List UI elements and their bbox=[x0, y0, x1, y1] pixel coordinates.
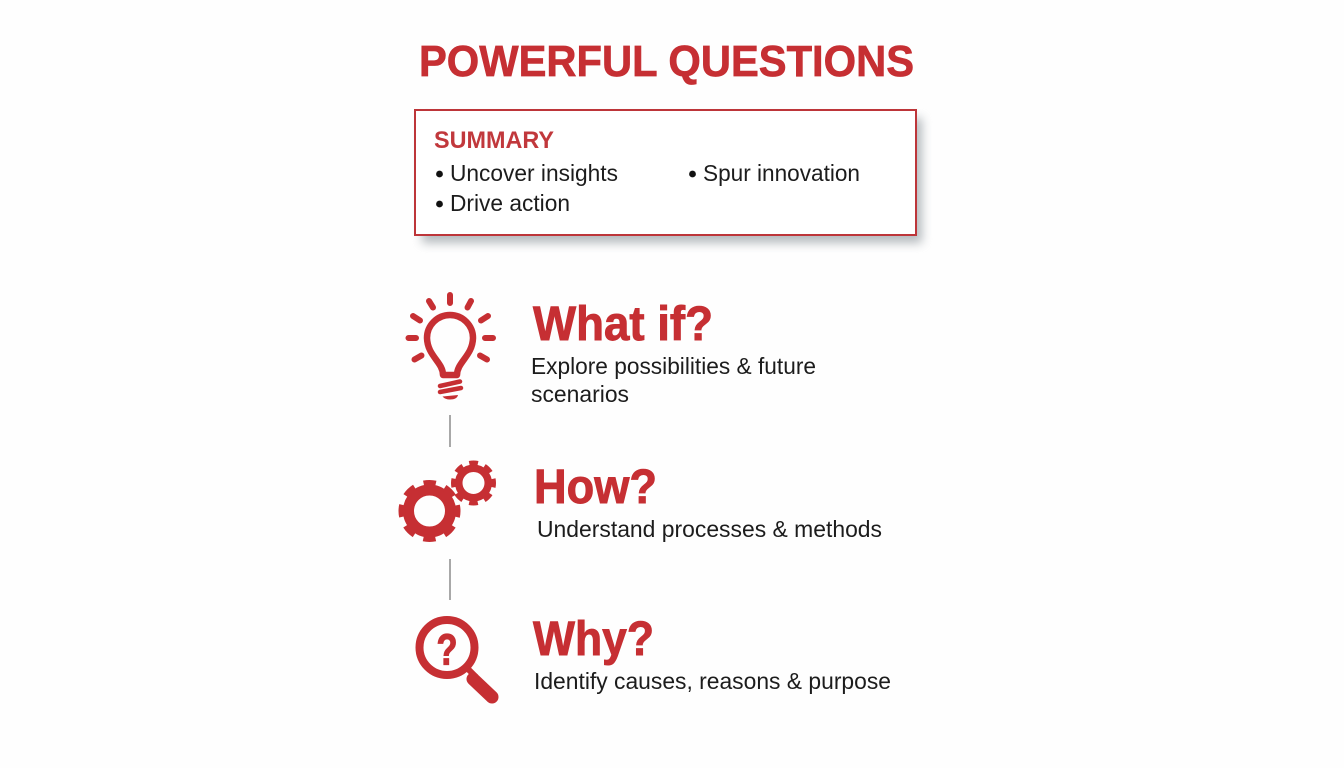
heading: why: Why? bbox=[533, 613, 654, 666]
text: why description: Identify causes, reasons & purpose bbox=[534, 668, 891, 694]
icon: gears bbox=[402, 463, 494, 538]
connector: how to why bbox=[449, 559, 451, 600]
heading: how: How? bbox=[534, 461, 657, 514]
text: what if description: Explore possibilities & future bbox=[531, 353, 816, 379]
connector: what if to how bbox=[449, 415, 451, 447]
icon: magnifying glass with question mark bbox=[420, 620, 492, 697]
summary item: uncover insights: Uncover insights bbox=[450, 160, 618, 186]
icon: magnifying glass with question mark: ? bbox=[436, 626, 458, 674]
text: what if description: scenarios bbox=[531, 381, 629, 407]
summary item: spur innovation: Spur innovation bbox=[703, 160, 860, 186]
summary heading: SUMMARY bbox=[434, 127, 554, 154]
icon: light bulb bbox=[408, 295, 493, 400]
panel: summary bbox=[415, 110, 922, 243]
heading: what if: What if? bbox=[533, 298, 713, 351]
summary item: drive action: Drive action bbox=[450, 190, 570, 216]
text: how description: Understand processes & methods bbox=[537, 516, 882, 542]
text: what if description bbox=[531, 353, 816, 407]
title: POWERFUL QUESTIONS bbox=[419, 37, 914, 86]
